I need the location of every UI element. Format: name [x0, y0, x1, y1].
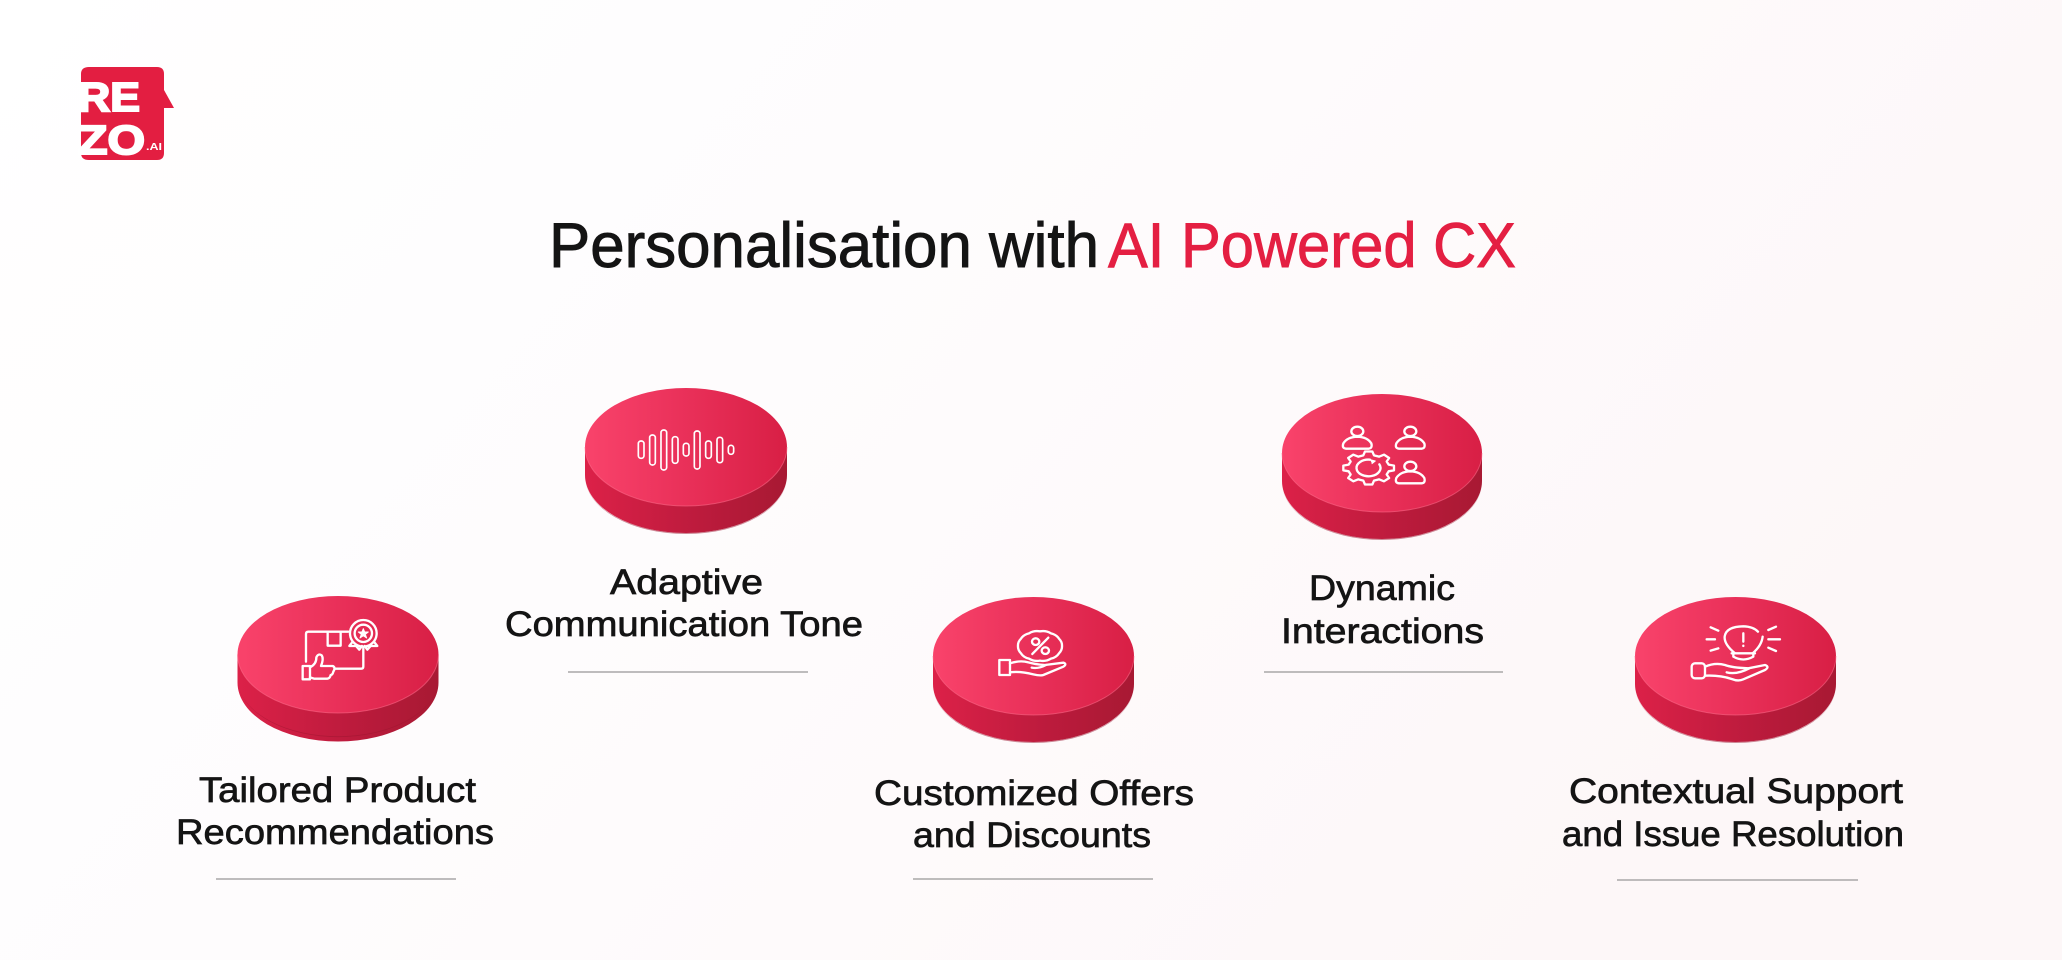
label: Contextual Support: [1569, 772, 1903, 811]
icon: people and gear: [1343, 427, 1425, 484]
label: Dynamic: [1309, 569, 1455, 608]
label: [505, 563, 863, 644]
icon: light bulb on hand: [1692, 626, 1780, 680]
disc: [933, 597, 1134, 743]
disc: [238, 596, 438, 742]
logo: REZO.AI: RE: [78, 74, 140, 120]
icon: discount badge on hand: [999, 631, 1065, 675]
disc: [1635, 597, 1836, 743]
label: Adaptive: [610, 563, 763, 602]
label: Interactions: [1281, 612, 1484, 651]
label: and Discounts: [913, 816, 1151, 855]
panel: Contextual Support and Issue Resolution: [1562, 597, 1904, 880]
panel: Tailored Product Recommendations: [176, 596, 494, 879]
logo: REZO.AI: ZO: [78, 117, 145, 163]
disc: [1282, 394, 1482, 540]
disc: [585, 388, 787, 534]
label: Customized Offers: [874, 774, 1194, 813]
icon: box with thumbs up and medal: [303, 620, 377, 679]
label: [874, 774, 1194, 855]
label: [176, 771, 494, 852]
panel: Adaptive Communication Tone: [505, 388, 863, 672]
label: Recommendations: [176, 813, 494, 852]
logo: REZO.AI: [78, 67, 174, 163]
label: [1562, 772, 1904, 854]
title: [549, 211, 1516, 281]
label: [1281, 569, 1484, 651]
panel: Dynamic Interactions: [1264, 394, 1503, 672]
logo: REZO.AI: .AI: [146, 142, 162, 153]
title: AI Powered CX: [1108, 211, 1516, 281]
label: Tailored Product: [199, 771, 476, 810]
title: Personalisation with: [549, 211, 1099, 281]
panel: Customized Offers and Discounts: [874, 597, 1194, 879]
label: and Issue Resolution: [1562, 815, 1904, 854]
icon: sound wave: [638, 430, 734, 470]
label: Communication Tone: [505, 605, 863, 644]
